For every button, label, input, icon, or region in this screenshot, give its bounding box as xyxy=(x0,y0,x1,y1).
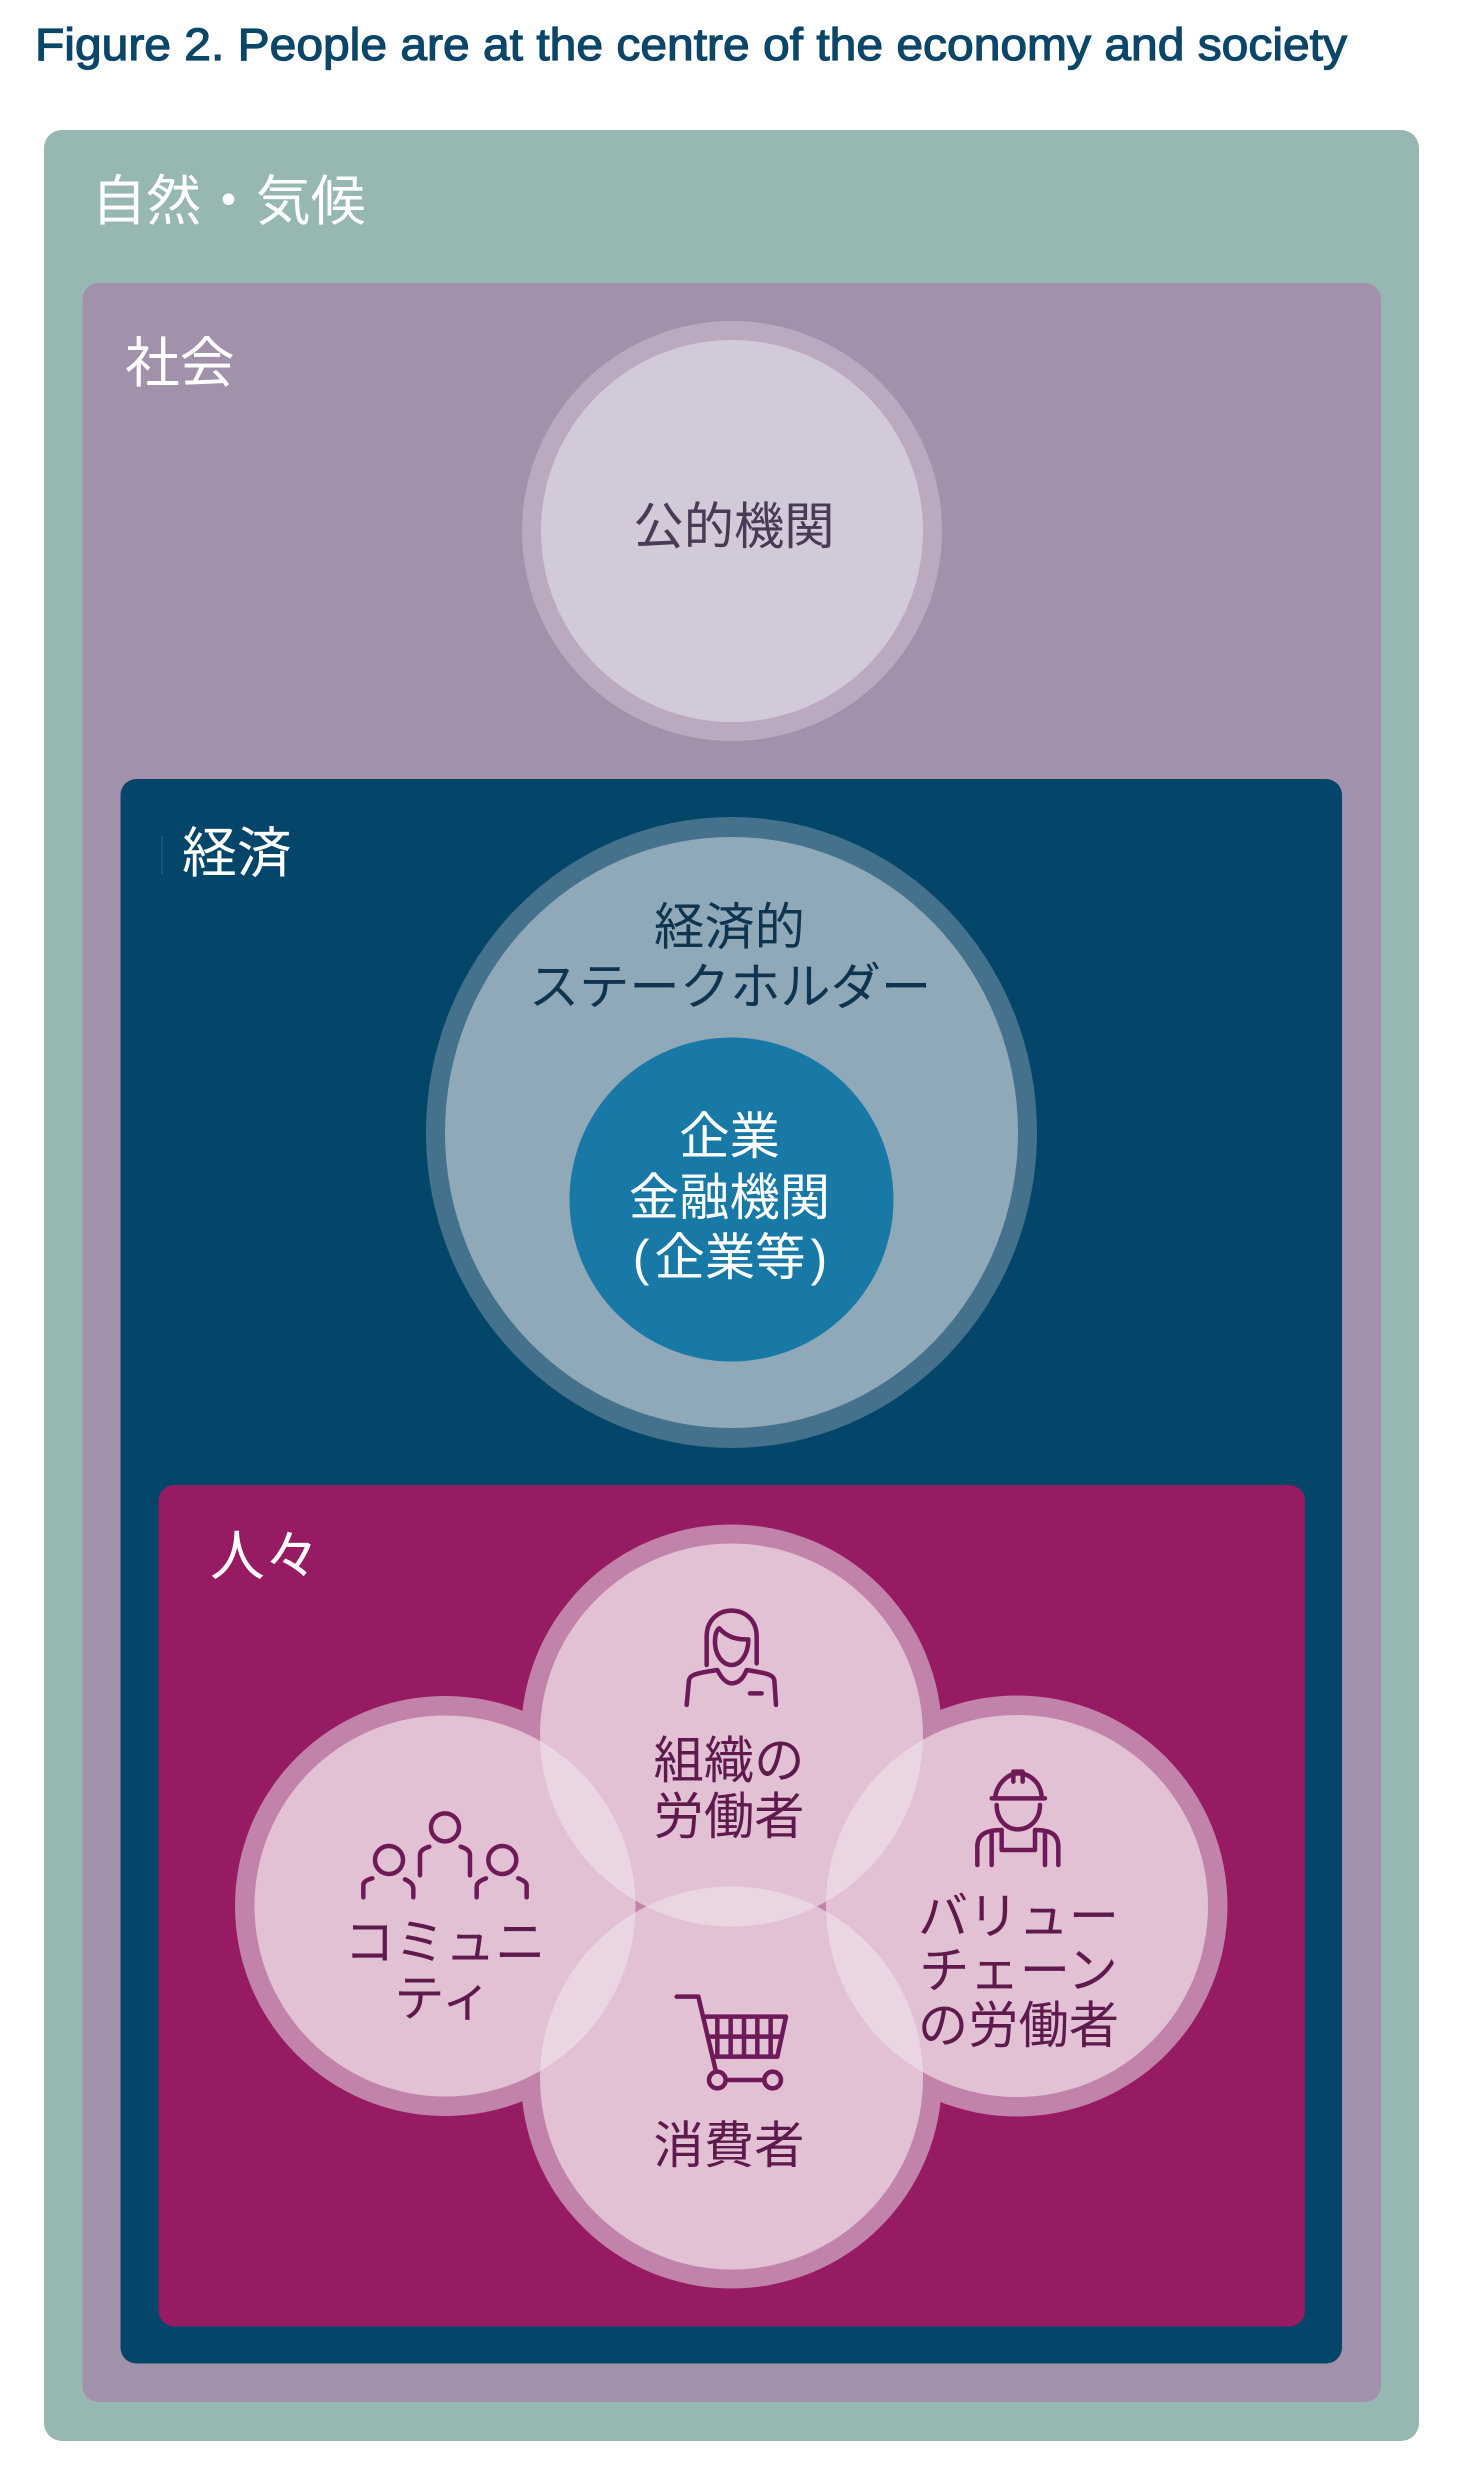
circle: public institutions xyxy=(522,321,942,741)
heading: society: 社会 xyxy=(125,332,235,394)
circle: companies and financial institutions xyxy=(570,1038,894,1362)
heading: nature and climate: 自然・気候 xyxy=(92,170,366,232)
group: consumers: 消費者 xyxy=(654,2117,804,2174)
group: value chain workers: チェーン xyxy=(919,1942,1118,1999)
group: community: コミュニ xyxy=(344,1914,546,1971)
heading: people: 人々 xyxy=(210,1525,320,1587)
circle: public institutions: 公的機関 xyxy=(633,498,835,555)
heading: economy: 経済 xyxy=(182,822,292,884)
group: value chain workers: バリュー xyxy=(918,1888,1119,1945)
icon: community xyxy=(363,1813,527,1897)
group: consumers xyxy=(654,1997,804,2174)
circle: economic stakeholders: ステークホルダー xyxy=(529,958,931,1016)
panel: people xyxy=(158,1485,1305,2326)
title: Figure 2. People are at the centre of the economy and society xyxy=(35,19,1348,70)
panel: economy xyxy=(120,779,1342,2364)
group: organisation workers: 組織の xyxy=(654,1732,804,1789)
group: organisation workers xyxy=(654,1611,804,1845)
panel: society xyxy=(82,283,1381,2402)
icon: shopping cart xyxy=(677,1997,786,2088)
group: value chain workers xyxy=(918,1772,1119,2054)
group: community: ティ xyxy=(394,1970,492,2027)
venn circle rings xyxy=(235,1524,1228,2288)
venn overlaps xyxy=(540,1740,923,2072)
icon: construction worker xyxy=(977,1772,1058,1865)
circle: economic stakeholders: 経済的 xyxy=(654,898,805,956)
icon: woman xyxy=(687,1611,776,1705)
circle: companies and financial institutions: (企業等) xyxy=(633,1229,827,1286)
circle: companies and financial institutions: 企業 xyxy=(679,1108,780,1165)
circle: economic stakeholders xyxy=(426,817,1037,1448)
venn circle fills xyxy=(254,1544,1208,2270)
group: community xyxy=(344,1813,546,2027)
group: organisation workers: 労働者 xyxy=(654,1788,804,1845)
group: value chain workers: の労働者 xyxy=(918,1997,1119,2054)
circle: companies and financial institutions: 金融機関 xyxy=(629,1169,830,1226)
